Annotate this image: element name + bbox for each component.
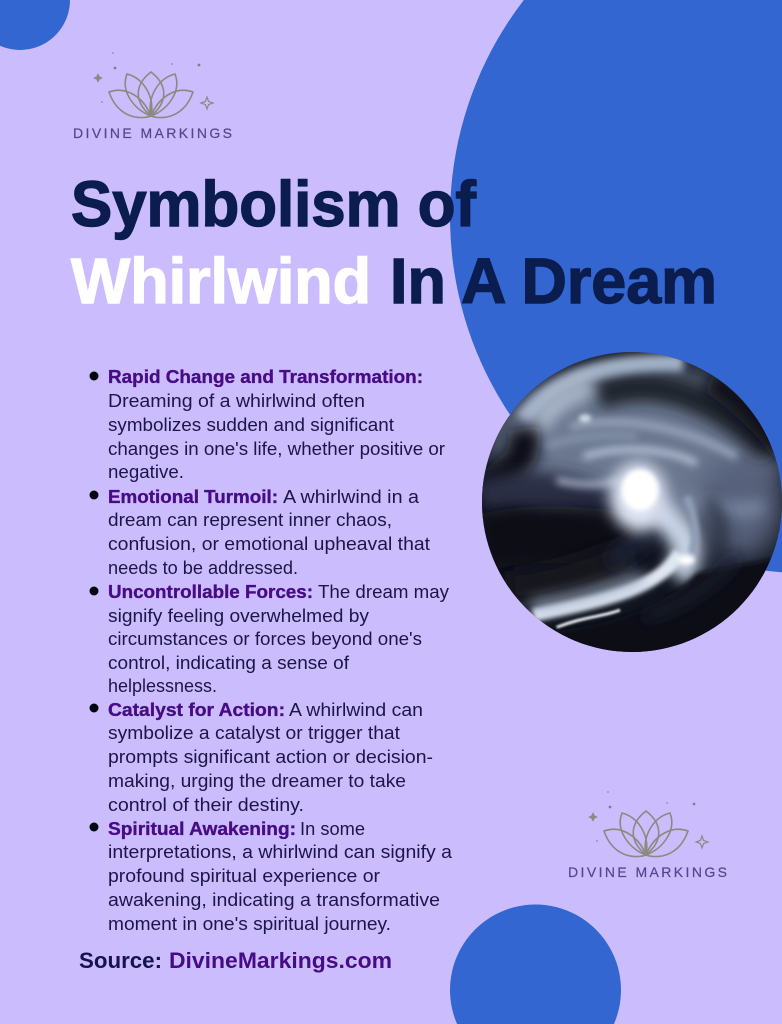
list item: spiritual awakening: In some bbox=[300, 819, 365, 839]
list item: rapid change bbox=[90, 367, 445, 482]
source line: Source: bbox=[79, 948, 162, 973]
title bbox=[71, 168, 717, 317]
title line 2: highlighted word: Whirlwind bbox=[71, 245, 371, 317]
list item: uncontrollable forces: The dream may bbox=[318, 582, 449, 602]
list item: rapid change: negative. bbox=[108, 462, 184, 482]
list item: emotional turmoil: Emotional Turmoil: bbox=[108, 487, 278, 507]
list item: catalyst for action: Catalyst for Action: bbox=[108, 700, 285, 720]
list item: emotional turmoil: dream can represent inner chaos, bbox=[108, 510, 392, 530]
title line 1: Symbolism of bbox=[71, 168, 477, 240]
list item: rapid change: Dreaming of a whirlwind often bbox=[108, 391, 365, 411]
list item: rapid change: changes in one's life, whether positive or bbox=[108, 439, 445, 459]
list item: emotional turmoil: confusion, or emotional upheaval that bbox=[108, 534, 430, 554]
list item: spiritual awakening: Spiritual Awakening: bbox=[108, 819, 296, 839]
list item: spiritual awakening: profound spiritual experience or bbox=[108, 866, 380, 886]
list item: spiritual awakening: awakening, indicating a transformative bbox=[108, 890, 440, 910]
list item: emotional turmoil bbox=[90, 487, 430, 578]
list item: rapid change: Rapid Change and Transformation: bbox=[108, 367, 423, 387]
list item: catalyst for action: prompts significant action or decision- bbox=[108, 747, 433, 767]
list item: uncontrollable forces: circumstances or forces beyond one's bbox=[108, 629, 422, 649]
decorative circle: large top right bbox=[450, 0, 782, 572]
photo: whirlwind storm clouds bbox=[482, 352, 782, 652]
icon: lotus bbox=[589, 791, 708, 857]
list item: uncontrollable forces: helplessness. bbox=[108, 676, 217, 696]
list item: uncontrollable forces: control, indicating a sense of bbox=[108, 653, 350, 673]
decorative circle: bottom bbox=[450, 905, 621, 1024]
list item: uncontrollable forces: Uncontrollable Forces: bbox=[108, 582, 313, 602]
logo: bottom right bbox=[568, 791, 727, 880]
source line bbox=[79, 948, 392, 973]
list item: uncontrollable forces bbox=[90, 582, 449, 696]
decorative circle: top left bbox=[0, 0, 70, 50]
list item: uncontrollable forces: signify feeling overwhelmed by bbox=[108, 606, 369, 626]
title line 2: remainder: In A Dream bbox=[390, 245, 717, 317]
logo wordmark: DIVINE MARKINGS bbox=[568, 864, 727, 880]
list item: catalyst for action: making, urging the dreamer to take bbox=[108, 771, 406, 791]
list item: catalyst for action bbox=[90, 700, 433, 815]
logo wordmark: DIVINE MARKINGS bbox=[73, 125, 232, 141]
source line: DivineMarkings.com bbox=[169, 948, 392, 973]
list item: rapid change: symbolizes sudden and significant bbox=[108, 415, 394, 435]
list item: emotional turmoil: needs to be addressed. bbox=[108, 558, 298, 578]
list item: spiritual awakening: moment in one's spiritual journey. bbox=[108, 914, 391, 934]
icon: lotus bbox=[94, 52, 213, 118]
list item: spiritual awakening bbox=[90, 819, 453, 934]
list item: emotional turmoil: A whirlwind in a bbox=[283, 487, 420, 507]
bullet list bbox=[90, 367, 453, 934]
list item: catalyst for action: A whirlwind can bbox=[289, 700, 423, 720]
list item: catalyst for action: symbolize a catalyst or trigger that bbox=[108, 723, 400, 743]
list item: catalyst for action: control of their destiny. bbox=[108, 795, 304, 815]
list item: spiritual awakening: interpretations, a whirlwind can signify a bbox=[108, 842, 453, 862]
logo: top bbox=[73, 52, 232, 141]
